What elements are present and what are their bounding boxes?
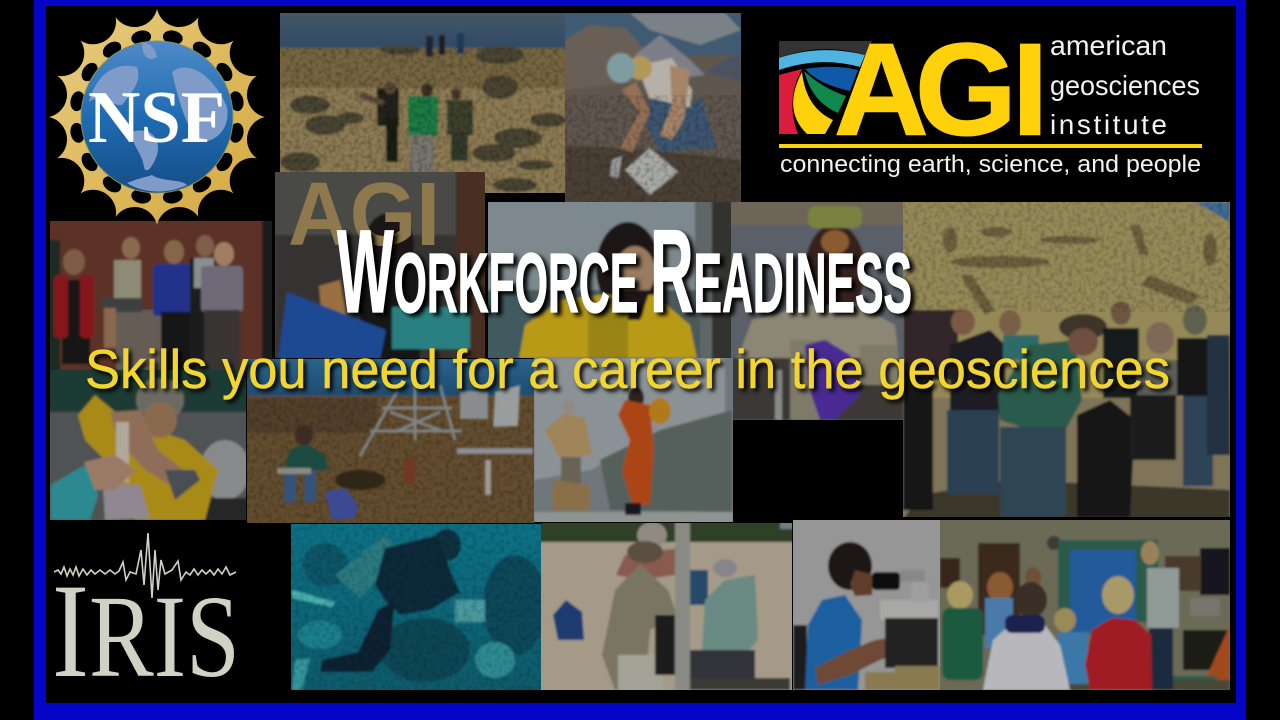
institute name: geosciences (1050, 70, 1200, 101)
seismic trace (54, 533, 236, 598)
photo: scientist with goggles and purple glove (731, 202, 903, 420)
photo: drilling on beach (541, 523, 792, 690)
NSF lettering: NSF (88, 77, 225, 159)
AGI emblem (779, 41, 872, 134)
photo: student with test tube (50, 370, 246, 520)
sun rays (49, 9, 265, 225)
photo: classroom (940, 520, 1230, 690)
IRIS lettering: IRIS (52, 557, 240, 706)
institute name: american (1050, 30, 1167, 61)
photo: volcanic steam with orange suit (534, 358, 733, 522)
photo: woman in yellow jacket (488, 202, 731, 358)
AGI letters: AGI (834, 16, 1048, 162)
logo: AGI (779, 16, 1202, 178)
institute name (1050, 30, 1200, 140)
logo: NSF (49, 9, 265, 225)
photo: group at brick wall (50, 221, 272, 372)
photo: student at microscope (793, 520, 940, 690)
tagline: connecting earth, science, and people (780, 151, 1201, 178)
globe (81, 41, 233, 193)
subtitle: Skills you need for a career in the geosciences (85, 338, 1170, 400)
photo: geologist sampling on mountain (565, 13, 741, 202)
photo: desert field team (280, 13, 565, 193)
institute name: institute (1050, 109, 1167, 140)
photo: field instruments (247, 359, 534, 523)
sign lettering: AGI (288, 165, 440, 265)
photo: students on coastal cliff (903, 202, 1230, 517)
logo: IRIS (52, 533, 240, 706)
photo: AGI sign and recycling (275, 165, 485, 358)
photo: scuba diver (291, 524, 541, 690)
title: WORKFORCE READINESS (337, 206, 912, 338)
